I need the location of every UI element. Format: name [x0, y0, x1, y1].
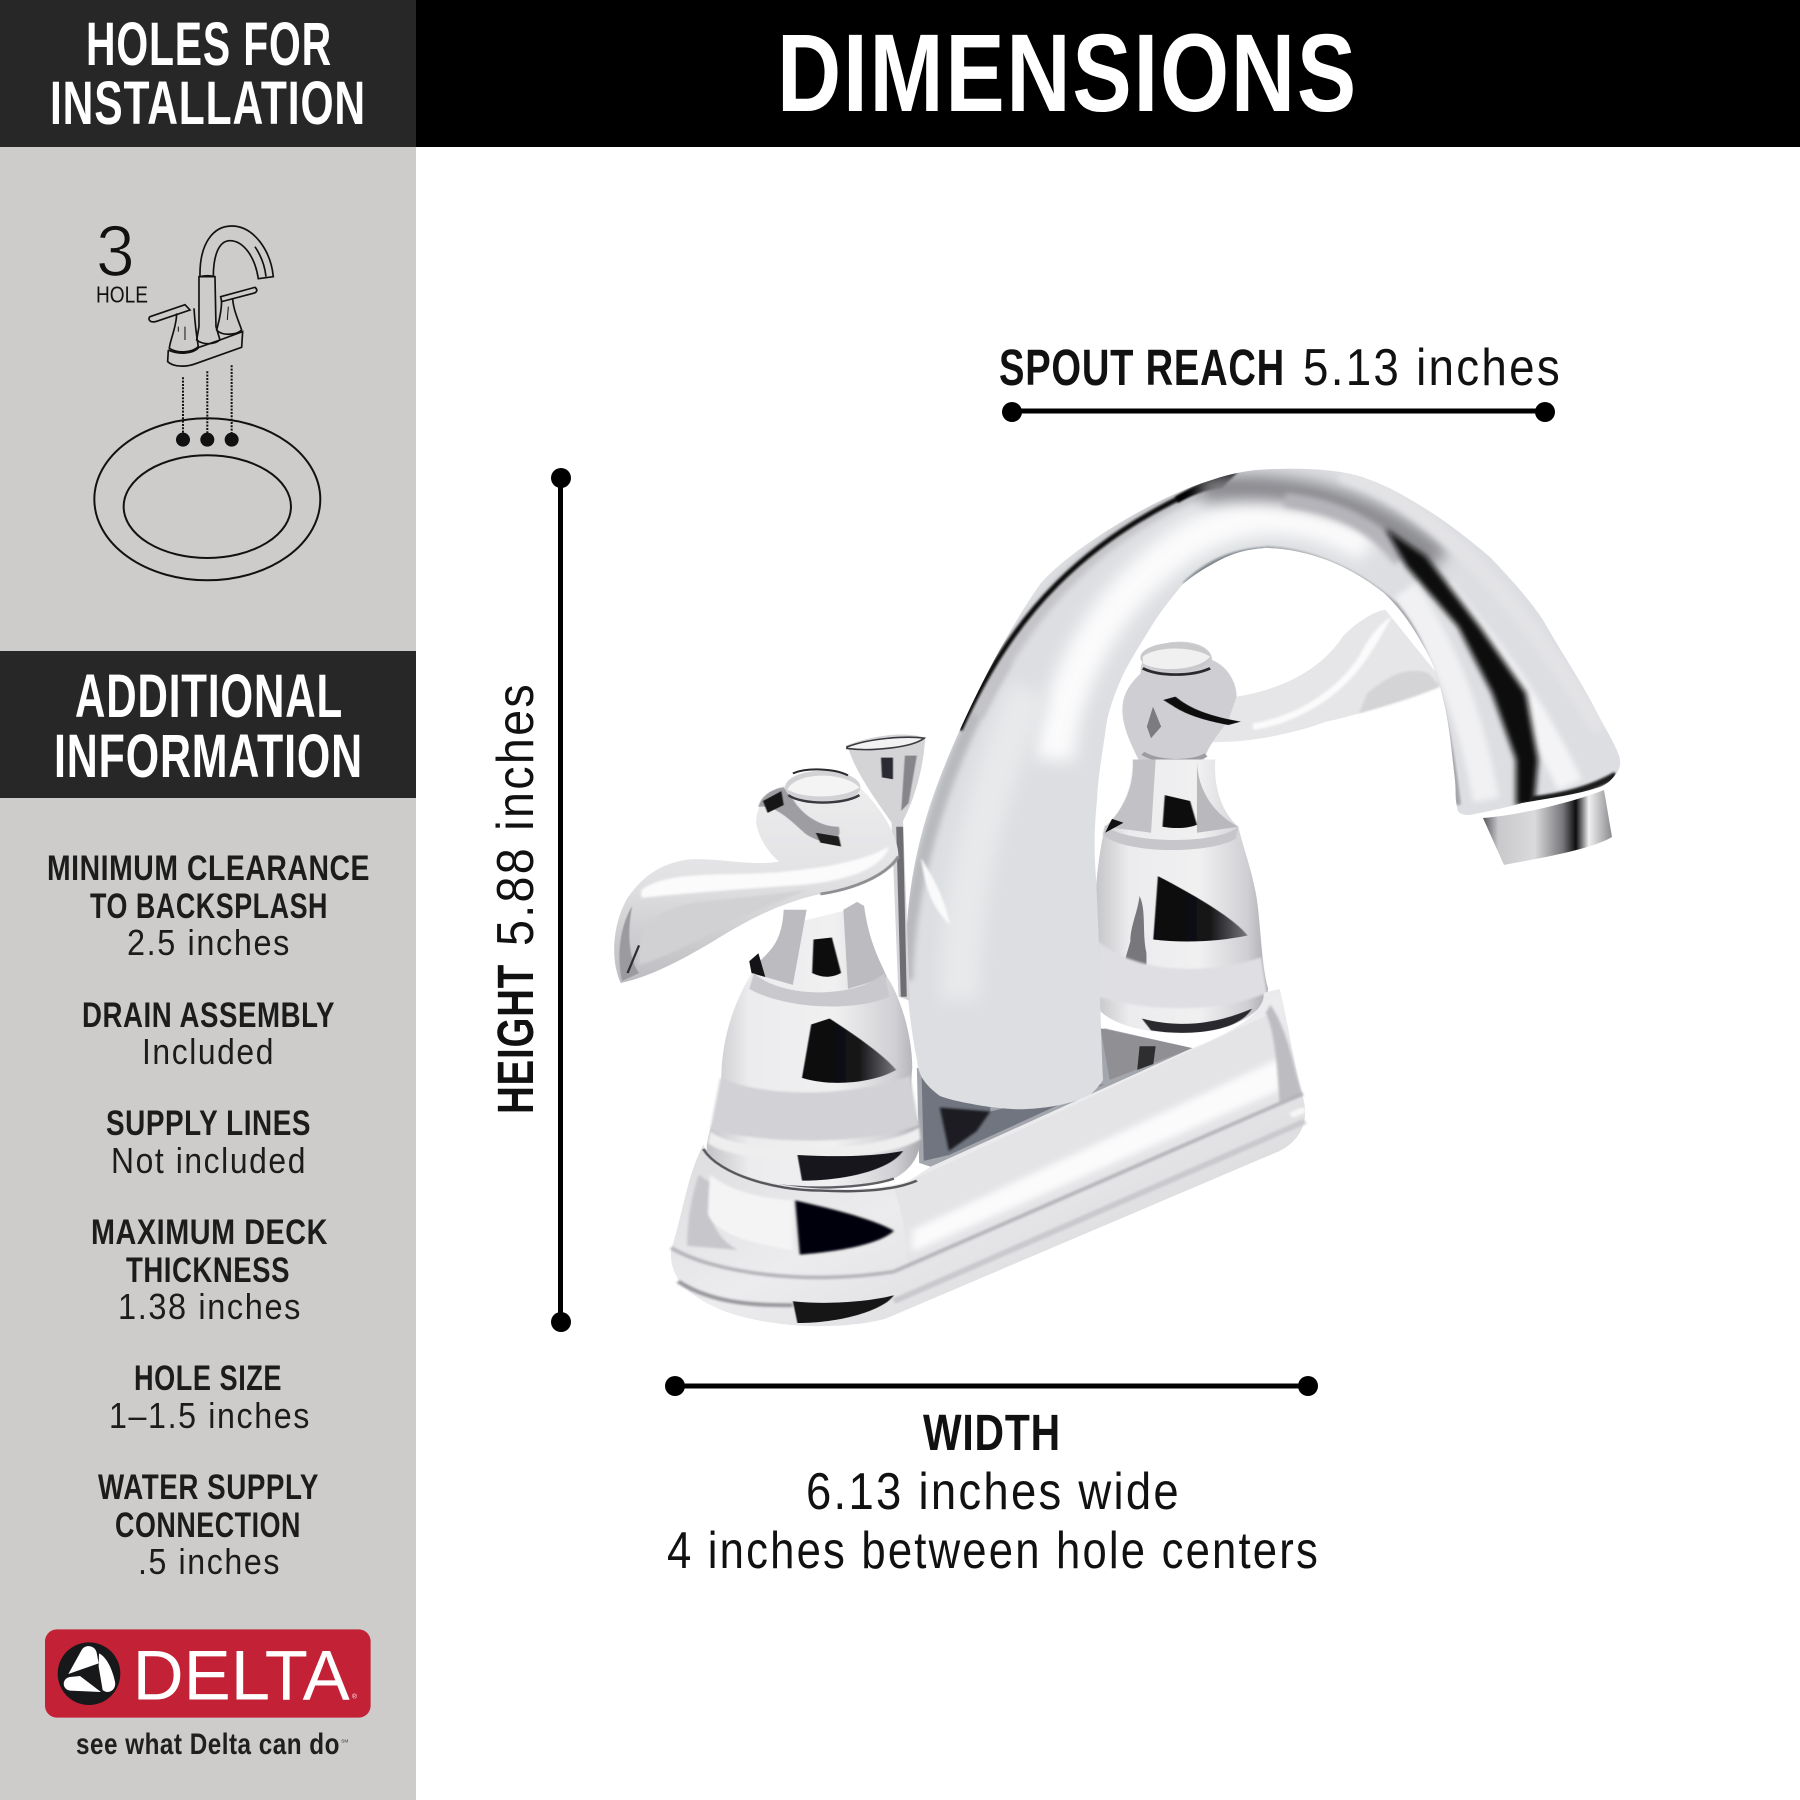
icon: three hole faucet and sink diagram: 3 — [96, 211, 135, 292]
text block: water supply connection: .5 inches — [138, 1541, 281, 1582]
text block: minimum clearance: MINIMUM CLEARANCE — [47, 849, 370, 888]
text block: maximum deck thickness — [91, 1213, 328, 1327]
heading: additional information: ADDITIONAL — [75, 662, 343, 730]
heading: dimensions: DIMENSIONS — [777, 12, 1358, 135]
text block: drain assembly — [82, 996, 335, 1072]
heading: additional information — [0, 651, 416, 798]
text block: water supply connection: WATER SUPPLY — [98, 1468, 319, 1507]
heading: holes for installation: HOLES FOR — [86, 10, 332, 78]
icon: three hole faucet and sink diagram — [94, 211, 320, 580]
text block: maximum deck thickness: MAXIMUM DECK — [91, 1213, 328, 1252]
product image: chrome faucet — [614, 469, 1620, 1326]
front lever — [614, 769, 898, 983]
dimension: width: WIDTH — [923, 1404, 1061, 1461]
icon: three hole faucet and sink diagram: HOLE — [96, 282, 148, 308]
text block: minimum clearance: 2.5 inches — [127, 922, 291, 963]
text block: supply lines: SUPPLY LINES — [106, 1104, 311, 1143]
heading: holes for installation — [0, 0, 416, 147]
text block: hole size: HOLE SIZE — [134, 1359, 282, 1398]
lift rod — [846, 735, 925, 1001]
logo: delta — [45, 1629, 371, 1761]
dimension: height — [487, 468, 571, 1332]
dimension: spout reach: SPOUT REACH — [999, 339, 1285, 396]
dimension: width: 4 inches between hole centers — [667, 1522, 1320, 1580]
dimension: spout reach: 5.13 inches — [1303, 339, 1562, 397]
spout — [906, 469, 1620, 1109]
dimension: spout reach — [999, 339, 1562, 422]
back handle bell — [1095, 760, 1268, 1033]
logo: delta: SM — [341, 1739, 348, 1744]
text block: water supply connection — [98, 1468, 319, 1582]
back lever and handle top — [1114, 610, 1445, 827]
text block: minimum clearance: TO BACKSPLASH — [90, 887, 328, 926]
base plate — [671, 989, 1305, 1326]
heading: dimensions — [416, 0, 1800, 147]
text block: maximum deck thickness: THICKNESS — [126, 1251, 290, 1290]
logo: delta: ® — [352, 1693, 357, 1701]
dimension: height: 5.88 inches — [487, 682, 545, 946]
aerator — [1483, 790, 1612, 865]
logo: delta: see what Delta can do — [76, 1728, 340, 1761]
text block: drain assembly: Included — [142, 1031, 275, 1072]
text block: supply lines — [106, 1104, 311, 1181]
text block: hole size: 1–1.5 inches — [109, 1395, 311, 1436]
text block: minimum clearance — [47, 849, 370, 963]
heading: holes for installation: INSTALLATION — [50, 69, 366, 137]
text block: water supply connection: CONNECTION — [115, 1506, 301, 1545]
text block: hole size — [109, 1359, 311, 1436]
dimension: width — [665, 1376, 1320, 1580]
deck behind spout — [917, 1028, 1192, 1167]
dimension: width: 6.13 inches wide — [806, 1463, 1181, 1521]
text block: supply lines: Not included — [111, 1140, 307, 1181]
text block: maximum deck thickness: 1.38 inches — [118, 1286, 302, 1327]
logo: delta: DELTA — [133, 1635, 353, 1714]
text block: drain assembly: DRAIN ASSEMBLY — [82, 996, 335, 1035]
front handle — [707, 902, 921, 1188]
heading: additional information: INFORMATION — [54, 722, 363, 790]
dimension: height: HEIGHT — [487, 964, 544, 1114]
panel: left sidebar — [0, 0, 416, 1800]
